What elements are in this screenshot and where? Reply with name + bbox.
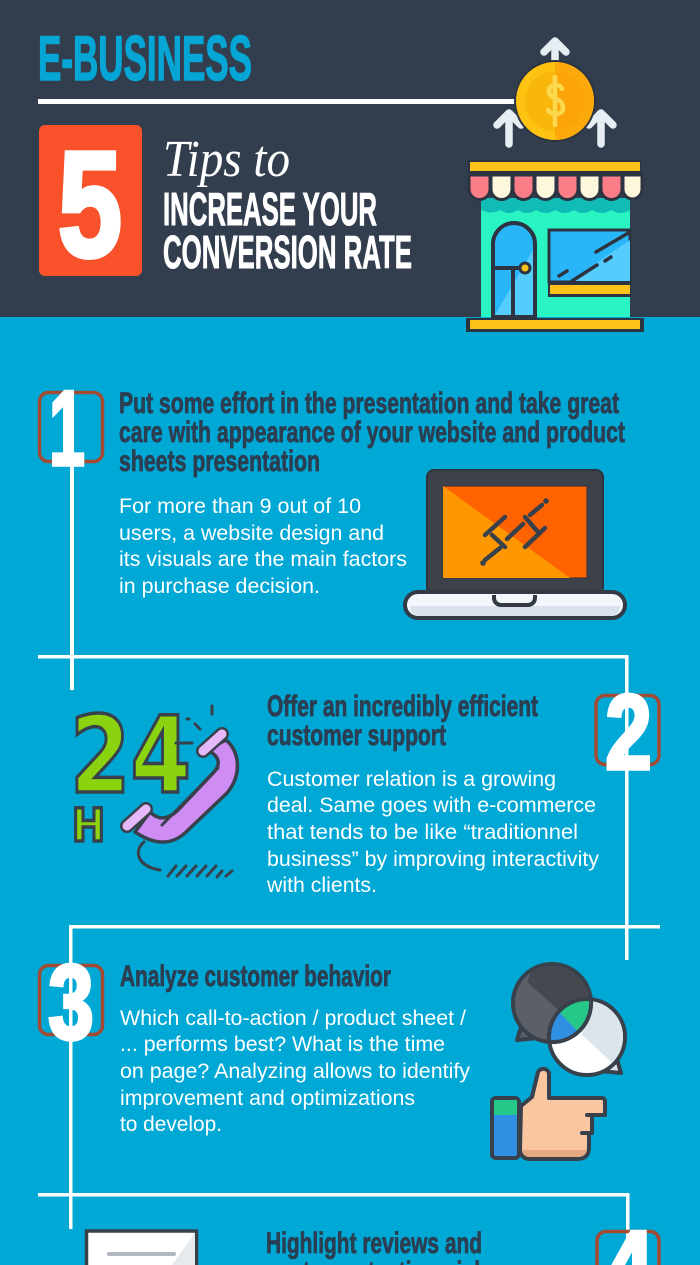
subtitle line 2: CONVERSION RATE [163, 226, 412, 278]
step 1 heading: sheets presentation [119, 445, 320, 478]
step 2 [70, 672, 659, 897]
icon: 24h phone: H [72, 799, 105, 852]
step 2 text [266, 768, 600, 897]
header panel [0, 0, 700, 317]
icon: 24h phone [70, 694, 237, 877]
icon: coin with arrows [497, 41, 613, 144]
number badge 3: 3 [48, 942, 94, 1062]
step 2 text: business” by improving interactivity [267, 848, 600, 871]
step 4 heading: Highlight reviews and [266, 1227, 482, 1260]
step 3 text: to develop. [120, 1113, 222, 1136]
step 4 heading [266, 1227, 492, 1265]
step 3 text: improvement and optimizations [120, 1087, 415, 1110]
step 3 [40, 942, 640, 1159]
icon: laptop [405, 470, 625, 618]
step 1 [40, 368, 625, 618]
icon: speech bubbles [511, 962, 627, 1077]
icon: 24h phone: 24 [70, 694, 191, 817]
step 1 text: its visuals are the main factors [119, 548, 407, 571]
step 3 text [120, 1007, 471, 1136]
icon: shop [466, 160, 644, 332]
step 1 text: For more than 9 out of 10 [119, 495, 361, 518]
step 2 text: deal. Same goes with e-commerce [267, 794, 596, 817]
step 1 text [119, 495, 407, 598]
step 3 text: ... performs best? What is the time [120, 1033, 445, 1056]
icon: thumbs up [492, 1069, 605, 1159]
connector lines [38, 390, 660, 1238]
step 1 text: in purchase decision. [119, 575, 320, 598]
step 2 text: with clients. [266, 874, 377, 897]
icon: document [86, 1231, 196, 1265]
step 2 heading: customer support [267, 719, 446, 752]
step 3 text: on page? Analyzing allows to identify [120, 1060, 471, 1083]
step 1 text: users, a website design and [119, 522, 384, 545]
step 2 text: Customer relation is a growing [267, 768, 556, 791]
number badge 2: 2 [605, 672, 652, 792]
step 2 text: that tends to be like “traditionnel [267, 821, 578, 844]
step 4 [84, 1208, 661, 1265]
number badge 1: 1 [49, 368, 85, 488]
step 2 heading [267, 690, 538, 752]
big number 5 badge: 5 [58, 120, 122, 288]
step 1 heading [119, 387, 625, 478]
subtitle line 1: INCREASE YOUR [163, 183, 377, 235]
title: E-BUSINESS [38, 24, 252, 94]
step 2 heading: Offer an incredibly efficient [267, 690, 538, 723]
step 3 heading: Analyze customer behavior [120, 960, 391, 993]
step 3 text: Which call-to-action / product sheet / [120, 1007, 466, 1030]
subtitle script: Tips to [163, 131, 290, 188]
title rule [38, 99, 518, 104]
